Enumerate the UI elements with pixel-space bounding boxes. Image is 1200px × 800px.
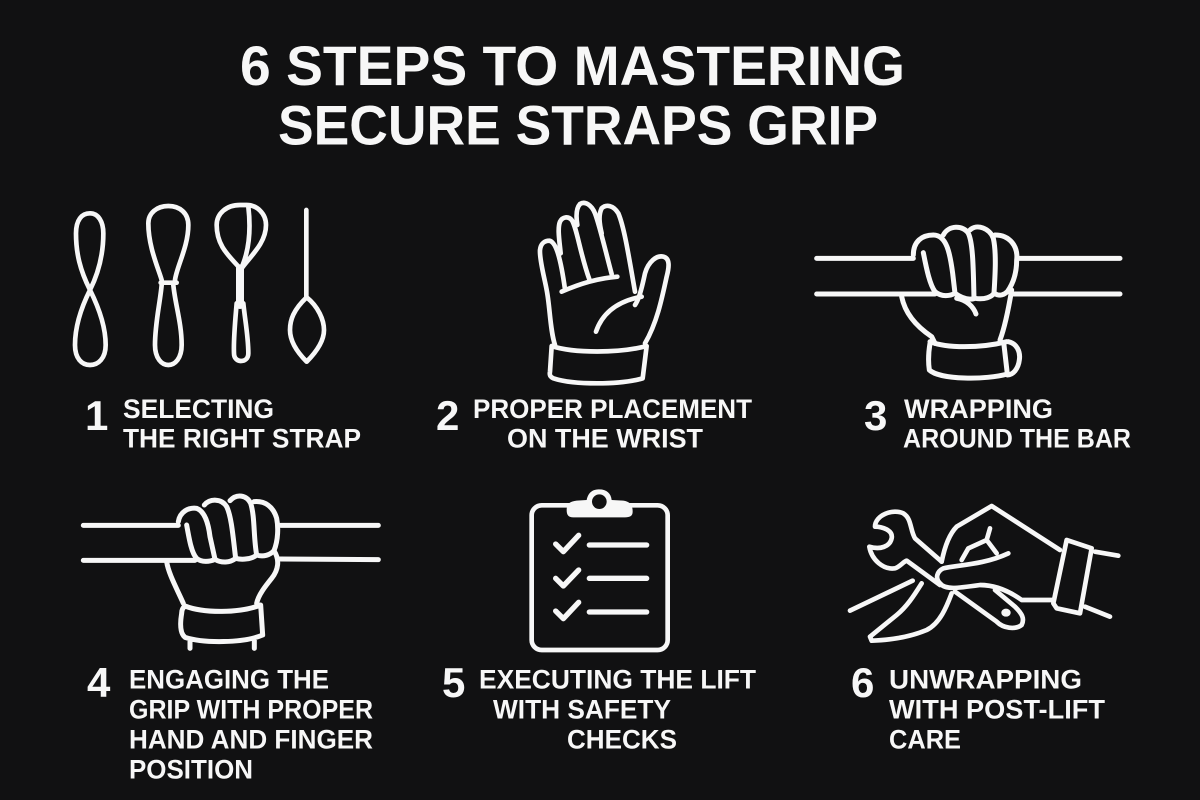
icon: hand with wrench and scissors bbox=[850, 506, 1118, 641]
step number 4: 4 bbox=[87, 659, 111, 706]
icon: open hand with wrist strap bbox=[540, 203, 669, 383]
step 4 label: HAND AND FINGER bbox=[129, 724, 373, 754]
step 5 label: EXECUTING THE LIFT bbox=[479, 664, 756, 694]
step 4 label: POSITION bbox=[129, 754, 253, 784]
step 2 label bbox=[473, 394, 752, 454]
step 4 label bbox=[129, 664, 373, 784]
step 5 label bbox=[479, 664, 756, 754]
panel: step 1 bbox=[75, 205, 361, 454]
icon: fist wrapped around the bar bbox=[817, 227, 1120, 378]
title: 6 STEPS TO MASTERING bbox=[240, 34, 905, 97]
panel: step 4 bbox=[83, 496, 378, 784]
icon: safety checklist clipboard bbox=[532, 489, 668, 650]
step 5 label: WITH SAFETY bbox=[493, 694, 671, 724]
step 4 label: GRIP WITH PROPER bbox=[129, 694, 373, 724]
step 5 label: CHECKS bbox=[567, 724, 677, 754]
step 6 label: UNWRAPPING bbox=[889, 664, 1082, 694]
step number 2: 2 bbox=[436, 392, 459, 439]
panel: step 6 bbox=[850, 506, 1118, 754]
step 2 label: PROPER PLACEMENT bbox=[473, 394, 752, 424]
title: SECURE STRAPS GRIP bbox=[278, 94, 878, 156]
icon: fist engaging the grip on the bar bbox=[83, 496, 378, 648]
step number 6: 6 bbox=[851, 659, 874, 706]
step 1 label bbox=[123, 394, 361, 454]
step 6 label: WITH POST-LIFT bbox=[889, 694, 1105, 724]
step number 1: 1 bbox=[85, 392, 108, 439]
step 3 label: WRAPPING bbox=[904, 394, 1053, 424]
step 1 label: SELECTING bbox=[123, 394, 274, 424]
step 6 label: CARE bbox=[889, 724, 961, 754]
panel: step 5 bbox=[442, 489, 756, 754]
step 3 label: AROUND THE BAR bbox=[903, 424, 1131, 454]
step 3 label bbox=[903, 394, 1131, 454]
step 4 label: ENGAGING THE bbox=[129, 664, 329, 694]
title bbox=[240, 34, 905, 156]
step 6 label bbox=[889, 664, 1105, 754]
panel: step 3 bbox=[817, 227, 1131, 454]
panel: step 2 bbox=[436, 203, 752, 454]
icon: four strap types bbox=[75, 205, 324, 365]
step 1 label: THE RIGHT STRAP bbox=[123, 424, 361, 454]
step number 5: 5 bbox=[442, 659, 465, 706]
step 2 label: ON THE WRIST bbox=[507, 424, 703, 454]
step number 3: 3 bbox=[864, 392, 887, 439]
